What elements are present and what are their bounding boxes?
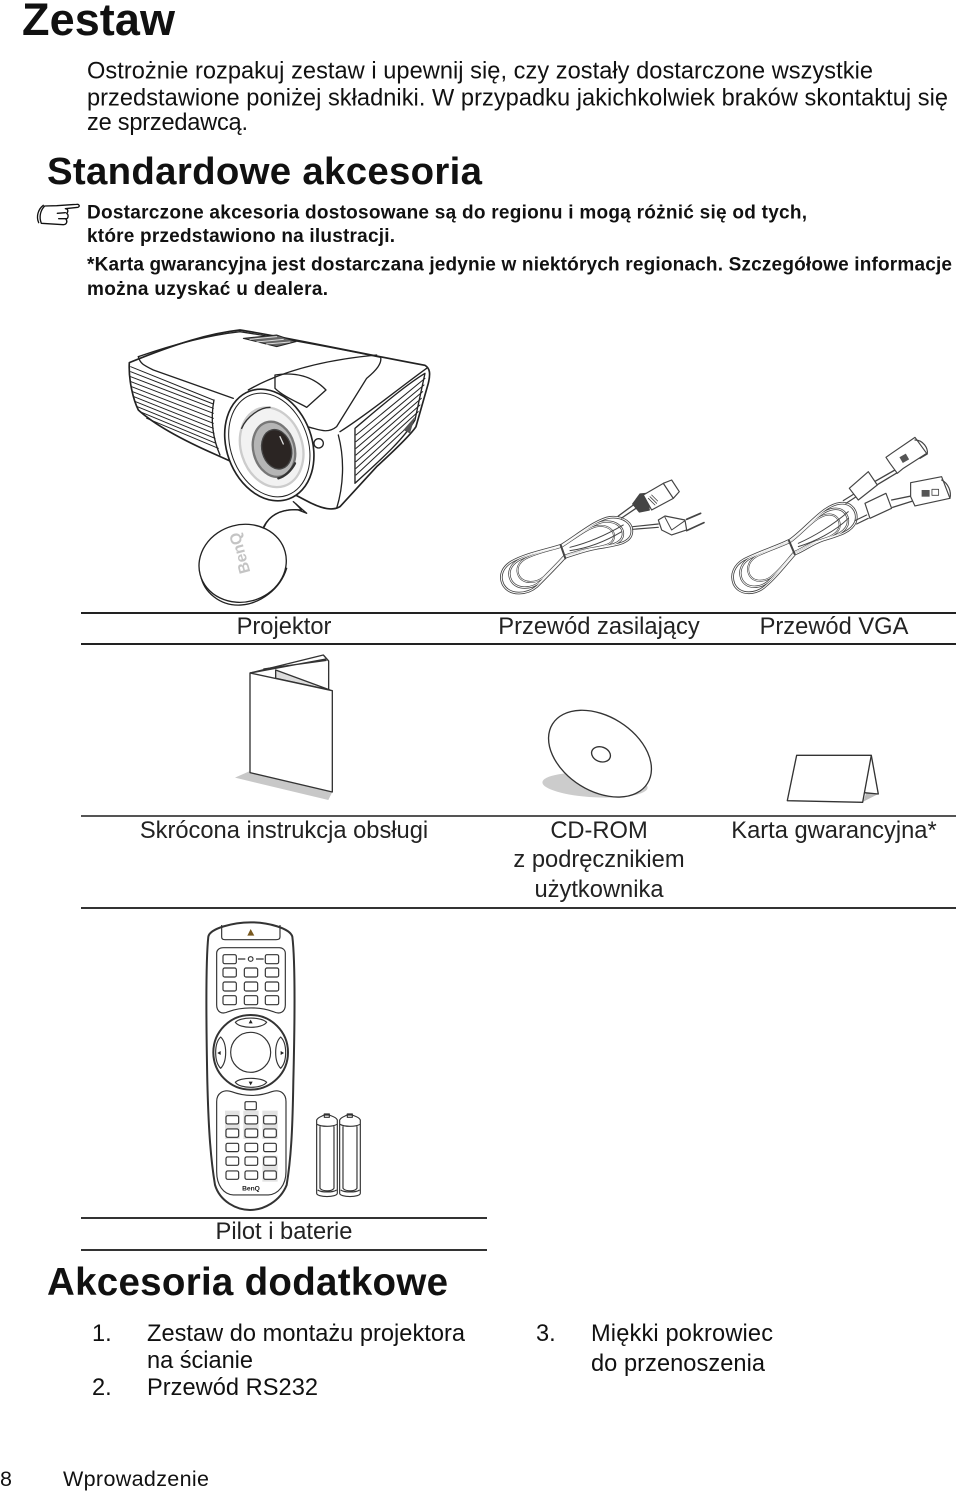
illustration: remote control <box>206 922 294 1210</box>
heading: optional accessories: Akcesoria dodatkowe <box>47 1261 448 1304</box>
rules: row 3 <box>81 1217 487 1251</box>
labels: row 1: Przewód VGA <box>760 614 909 640</box>
labels: row 2: użytkownika <box>534 877 664 903</box>
intro text: Ostrożnie rozpakuj zestaw i upewnij się, czy zostały dostarczone wszystkie <box>87 58 873 84</box>
note text: można uzyskać u dealera. <box>87 279 328 300</box>
labels: row 1: Przewód zasilający <box>498 614 700 640</box>
labels: row 2: CD-ROM <box>550 818 648 844</box>
footer: page number and section: 8 <box>0 1467 12 1491</box>
icon: quick start booklet <box>235 655 332 800</box>
illustration: projector with lens cap <box>129 330 430 612</box>
illustration: remote control: BenQ <box>242 1185 260 1192</box>
intro text: przedstawione poniżej składniki. W przypadku jakichkolwiek braków skontaktuj się <box>87 86 948 112</box>
note text: które przedstawiono na ilustracji. <box>87 226 395 247</box>
labels: row 2: Karta gwarancyjna* <box>731 818 937 844</box>
optional accessories list, left: na ścianie <box>147 1348 253 1374</box>
optional accessories list, left: 2. <box>92 1375 112 1401</box>
optional accessories list, left: Zestaw do montażu projektora <box>147 1321 466 1347</box>
note text: Dostarczone akcesoria dostosowane są do regionu i mogą różnić się od tych, <box>87 202 807 224</box>
icon: pointing hand <box>37 204 79 225</box>
optional accessories list, right: 3. <box>536 1321 556 1347</box>
rules: row 1 <box>81 612 956 645</box>
illustration: projector with lens cap: BenQ <box>227 531 254 575</box>
optional accessories list, left <box>92 1321 466 1401</box>
illustration: VGA cable <box>733 437 950 593</box>
heading: standard accessories: Standardowe akcesoria <box>47 150 483 193</box>
illustration: power cord <box>501 480 704 593</box>
optional accessories list, left: 1. <box>92 1321 112 1347</box>
footer: page number and section: Wprowadzenie <box>63 1467 209 1491</box>
icon: CD-ROM <box>533 692 667 815</box>
rules: row 2 <box>81 815 956 909</box>
optional accessories list, right: Miękki pokrowiec <box>591 1321 773 1347</box>
labels: row 1: Projektor <box>237 614 331 640</box>
labels: row 1 <box>237 614 909 640</box>
optional accessories list, right: do przenoszenia <box>591 1351 766 1377</box>
intro text <box>87 58 948 136</box>
labels: row 2 <box>140 818 937 903</box>
intro text: ze sprzedawcą. <box>87 110 248 136</box>
labels: row 2: z podręcznikiem <box>513 847 685 873</box>
labels: row 2: Skrócona instrukcja obsługi <box>140 818 428 844</box>
label: remote and batteries: Pilot i baterie <box>216 1219 352 1245</box>
optional accessories list, right <box>536 1321 773 1377</box>
illustration: batteries <box>317 1114 360 1197</box>
optional accessories list, left: Przewód RS232 <box>147 1375 318 1401</box>
note text: *Karta gwarancyjna jest dostarczana jedynie w niektórych regionach. Szczegółowe informacje <box>87 254 952 276</box>
note text <box>87 202 952 300</box>
footer: page number and section <box>0 1467 209 1491</box>
icon: warranty card <box>787 755 878 802</box>
